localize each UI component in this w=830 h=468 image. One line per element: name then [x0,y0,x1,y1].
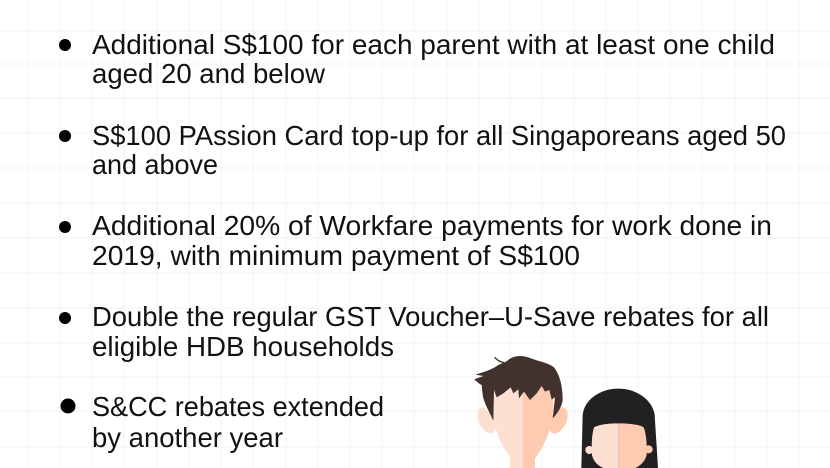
bullet item: Workfare: 2019, with minimum payment of S$100 [92,240,580,271]
bullet item: parent payment: aged 20 and below [92,58,325,89]
man neck [510,458,523,468]
woman ears [585,446,593,454]
bullet item: GST Voucher: eligible HDB households [92,331,394,362]
woman face [592,423,619,468]
bullet item: PAssion Card: S$100 PAssion Card top-up for all Singaporeans aged 50 [92,120,786,151]
bullet item: S&CC rebates: S&CC rebates extended [92,391,384,422]
bullet item: parent payment: Additional S$100 for each parent with at least one child [92,29,775,60]
man hair [474,356,563,421]
bullet item: PAssion Card: and above [92,149,218,180]
bullet item: S&CC rebates: by another year [92,422,283,453]
bullet item: S&CC rebates [60,391,384,453]
bullet item: Workfare: Additional 20% of Workfare payments for work done in [92,210,772,241]
bullet item: GST Voucher [59,301,769,362]
woman hair [581,389,658,468]
illustration: man and woman [474,356,658,468]
bullet item: GST Voucher: Double the regular GST Voucher–U-Save rebates for all [92,301,769,332]
man face [493,373,523,467]
man ears [477,407,496,433]
bullet item: parent payment [59,29,775,89]
bullet item: Workfare [59,210,772,271]
bullet item: PAssion Card [59,120,786,180]
